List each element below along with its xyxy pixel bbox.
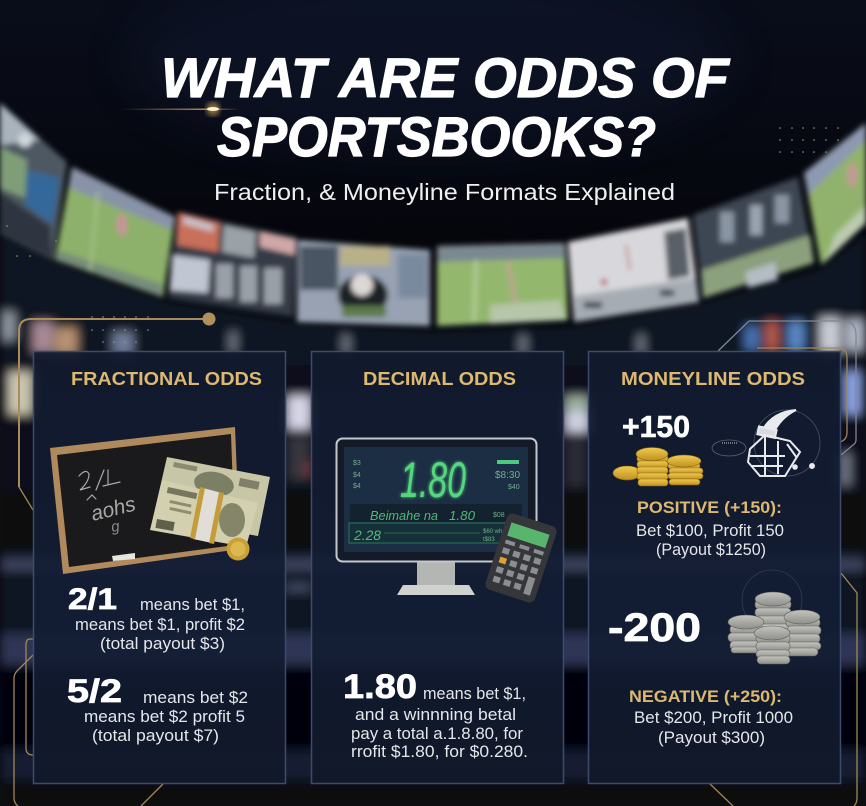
icon: monitor showing odds: $40	[508, 484, 520, 491]
subtitle: Fraction, & Moneyline Formats Explained	[214, 179, 675, 205]
text: positive explanation: POSITIVE (+150):	[637, 498, 782, 517]
icon: monitor showing odds: $60 whe	[483, 529, 506, 535]
text: positive explanation: (Payout $1250)	[656, 541, 766, 559]
text: 2/1 example	[68, 583, 245, 653]
icon: monitor showing odds: 1.80	[449, 508, 476, 523]
text: 2/1 example: (total payout $3)	[100, 635, 225, 653]
icon: monitor showing odds: $4	[353, 472, 361, 479]
panel: fractional odds	[34, 352, 286, 784]
icon: football helmet	[748, 410, 820, 476]
figure: -200: -200	[608, 606, 701, 650]
icon: chalkboard with banknotes: aohs	[89, 493, 138, 526]
title: SPORTSBOOKS?	[217, 105, 656, 168]
decorative dots	[6, 127, 839, 343]
screen: center football field	[437, 243, 568, 326]
icon: monitor showing odds: $8:30	[495, 470, 520, 481]
text: 5/2 example	[67, 673, 248, 745]
text: 1.80 explanation: and a winnning betal	[355, 706, 516, 724]
text: negative explanation	[629, 687, 793, 747]
text: 2/1 example: 2/1	[68, 583, 117, 616]
text: 5/2 example: (total payout $7)	[92, 727, 219, 745]
text: 1.80 explanation	[343, 668, 528, 761]
panel: moneyline odds	[588, 352, 840, 784]
icon: silver coin stacks	[728, 570, 821, 664]
icon: monitor showing odds: $4	[353, 483, 361, 490]
lens flare	[120, 102, 240, 116]
text: 1.80 explanation: means bet $1,	[423, 685, 526, 703]
text: 5/2 example: 5/2	[67, 673, 122, 709]
icon: monitor showing odds: $08	[493, 512, 505, 519]
figure: +150: +150	[622, 409, 690, 444]
icon: monitor showing odds: $3	[353, 460, 361, 467]
screen: scoreboard multi panel	[168, 212, 297, 317]
heading: fractional odds: FRACTIONAL ODDS	[71, 369, 262, 389]
text: 2/1 example: means bet $1, profit $2	[75, 616, 245, 634]
text: 1.80 explanation: pay a total a.1.8.80, for	[351, 725, 524, 743]
icon: monitor showing odds: 1.80	[400, 452, 466, 508]
icon: monitor showing odds: Beimahe na	[370, 508, 438, 523]
icon: chalkboard with banknotes	[50, 427, 270, 574]
heading: decimal odds: DECIMAL ODDS	[363, 369, 516, 389]
icon: monitor showing odds	[336, 438, 558, 604]
screen: right stadium	[693, 177, 814, 298]
gold node	[202, 312, 216, 326]
title	[161, 46, 731, 168]
icon: chalkboard with banknotes: g	[110, 518, 122, 536]
icon: monitor showing odds: t$83	[483, 537, 495, 543]
text: 5/2 example: means bet $2 profit 5	[84, 708, 245, 726]
decorative gold circuit lines	[14, 319, 857, 806]
text: positive explanation: Bet $100, Profit 150	[636, 522, 784, 540]
text: negative explanation: NEGATIVE (+250):	[629, 687, 782, 706]
screen: white stats board	[568, 218, 699, 322]
text: 5/2 example: means bet $2	[143, 689, 248, 707]
icon: football outline	[712, 440, 746, 456]
text: 1.80 explanation: rrofit $1.80, for $0.280.	[351, 743, 528, 761]
panel: decimal odds	[312, 352, 564, 784]
screen: far right field	[804, 123, 866, 265]
screen: center team panel	[297, 240, 430, 326]
heading: moneyline odds: MONEYLINE ODDS	[621, 369, 805, 389]
icon: gold coins	[613, 448, 703, 486]
icon: monitor showing odds: 2.28	[353, 527, 381, 543]
text: 1.80 explanation: 1.80	[343, 668, 417, 706]
screen: left football field	[55, 167, 175, 297]
title: WHAT ARE ODDS OF	[161, 46, 731, 109]
text: negative explanation: (Payout $300)	[658, 729, 765, 747]
text: negative explanation: Bet $200, Profit 1000	[634, 709, 793, 727]
text: positive explanation	[636, 498, 784, 559]
screen: far left	[0, 103, 67, 260]
video wall screens	[0, 103, 866, 326]
text: 2/1 example: means bet $1,	[140, 596, 245, 614]
